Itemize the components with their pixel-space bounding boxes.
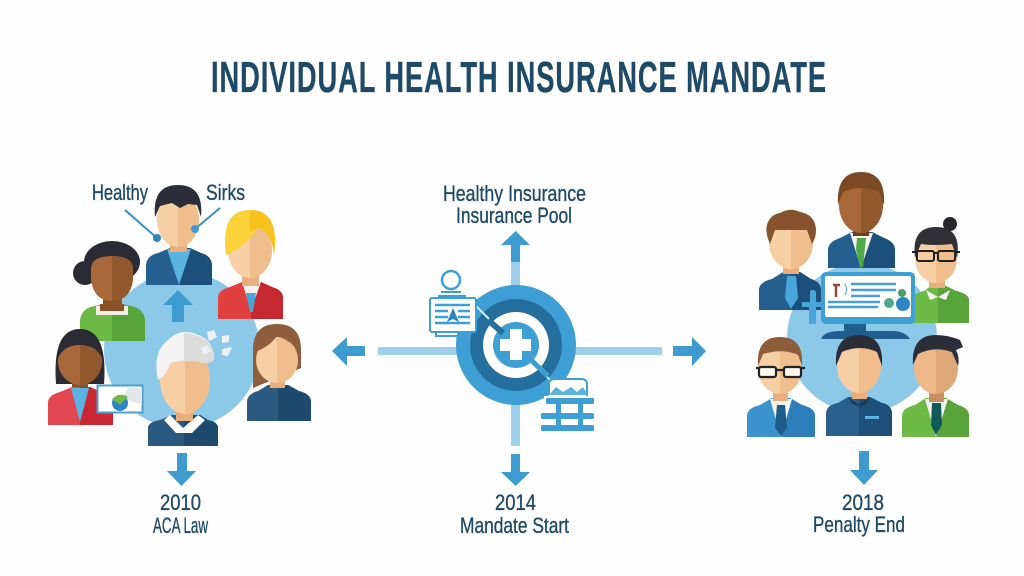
icon: medical target bbox=[456, 285, 576, 405]
icon: document with badge bbox=[430, 271, 476, 336]
background circle right bbox=[787, 263, 937, 413]
label: mandate start: Mandate Start bbox=[460, 513, 569, 538]
label: 2010: 2010 bbox=[160, 490, 201, 515]
panel: center hub, 2014 bbox=[332, 181, 706, 538]
label: penalty end: Penalty End bbox=[813, 512, 905, 537]
arrow: up center bbox=[501, 231, 530, 262]
person: curly hair man bbox=[759, 210, 821, 310]
icon: presentation monitor bbox=[802, 272, 915, 339]
arrow: down left bbox=[167, 453, 196, 486]
person: right woman bbox=[247, 324, 311, 421]
person: green woman bbox=[73, 241, 145, 341]
arrow: down center bbox=[501, 454, 530, 486]
arrow: up inside circle bbox=[163, 290, 193, 322]
icon: floating flakes bbox=[201, 330, 232, 356]
label: 2018: 2018 bbox=[842, 490, 884, 515]
arrow: right center bbox=[673, 337, 706, 366]
label: sirks: Sirks bbox=[206, 180, 245, 205]
panel: right group, 2018 bbox=[747, 172, 969, 537]
icon: basket stack bbox=[541, 379, 594, 431]
label: 2014: 2014 bbox=[495, 490, 536, 515]
label: healthy insurance pool bbox=[443, 181, 586, 228]
arrow: left center bbox=[332, 337, 365, 366]
person: right man bbox=[902, 335, 969, 437]
pointer: healthy bbox=[125, 210, 161, 242]
person: blonde woman bbox=[218, 210, 283, 319]
label: healthy insurance pool: Healthy Insurance bbox=[443, 181, 586, 206]
pointer: sicks bbox=[191, 208, 220, 233]
panel: left group, 2010 bbox=[48, 180, 311, 538]
person: bottom-left woman bbox=[48, 329, 113, 425]
label: ACA Law: ACA Law bbox=[153, 513, 208, 538]
icon: chart monitor bbox=[98, 386, 142, 412]
background circle left bbox=[104, 272, 260, 428]
person: top man bbox=[146, 185, 212, 285]
person: older man bbox=[148, 332, 218, 446]
person: glasses woman bbox=[912, 217, 969, 323]
person: center man bbox=[826, 335, 892, 436]
connector bars bbox=[378, 262, 662, 446]
label: healthy: Healthy bbox=[92, 180, 148, 205]
person: glasses man bbox=[747, 337, 815, 437]
person: top man dark skin bbox=[828, 172, 895, 268]
arrow: down right bbox=[850, 451, 878, 485]
title: INDIVIDUAL HEALTH INSURANCE MANDATE bbox=[211, 52, 826, 102]
label: healthy insurance pool: Insurance Pool bbox=[456, 203, 572, 228]
